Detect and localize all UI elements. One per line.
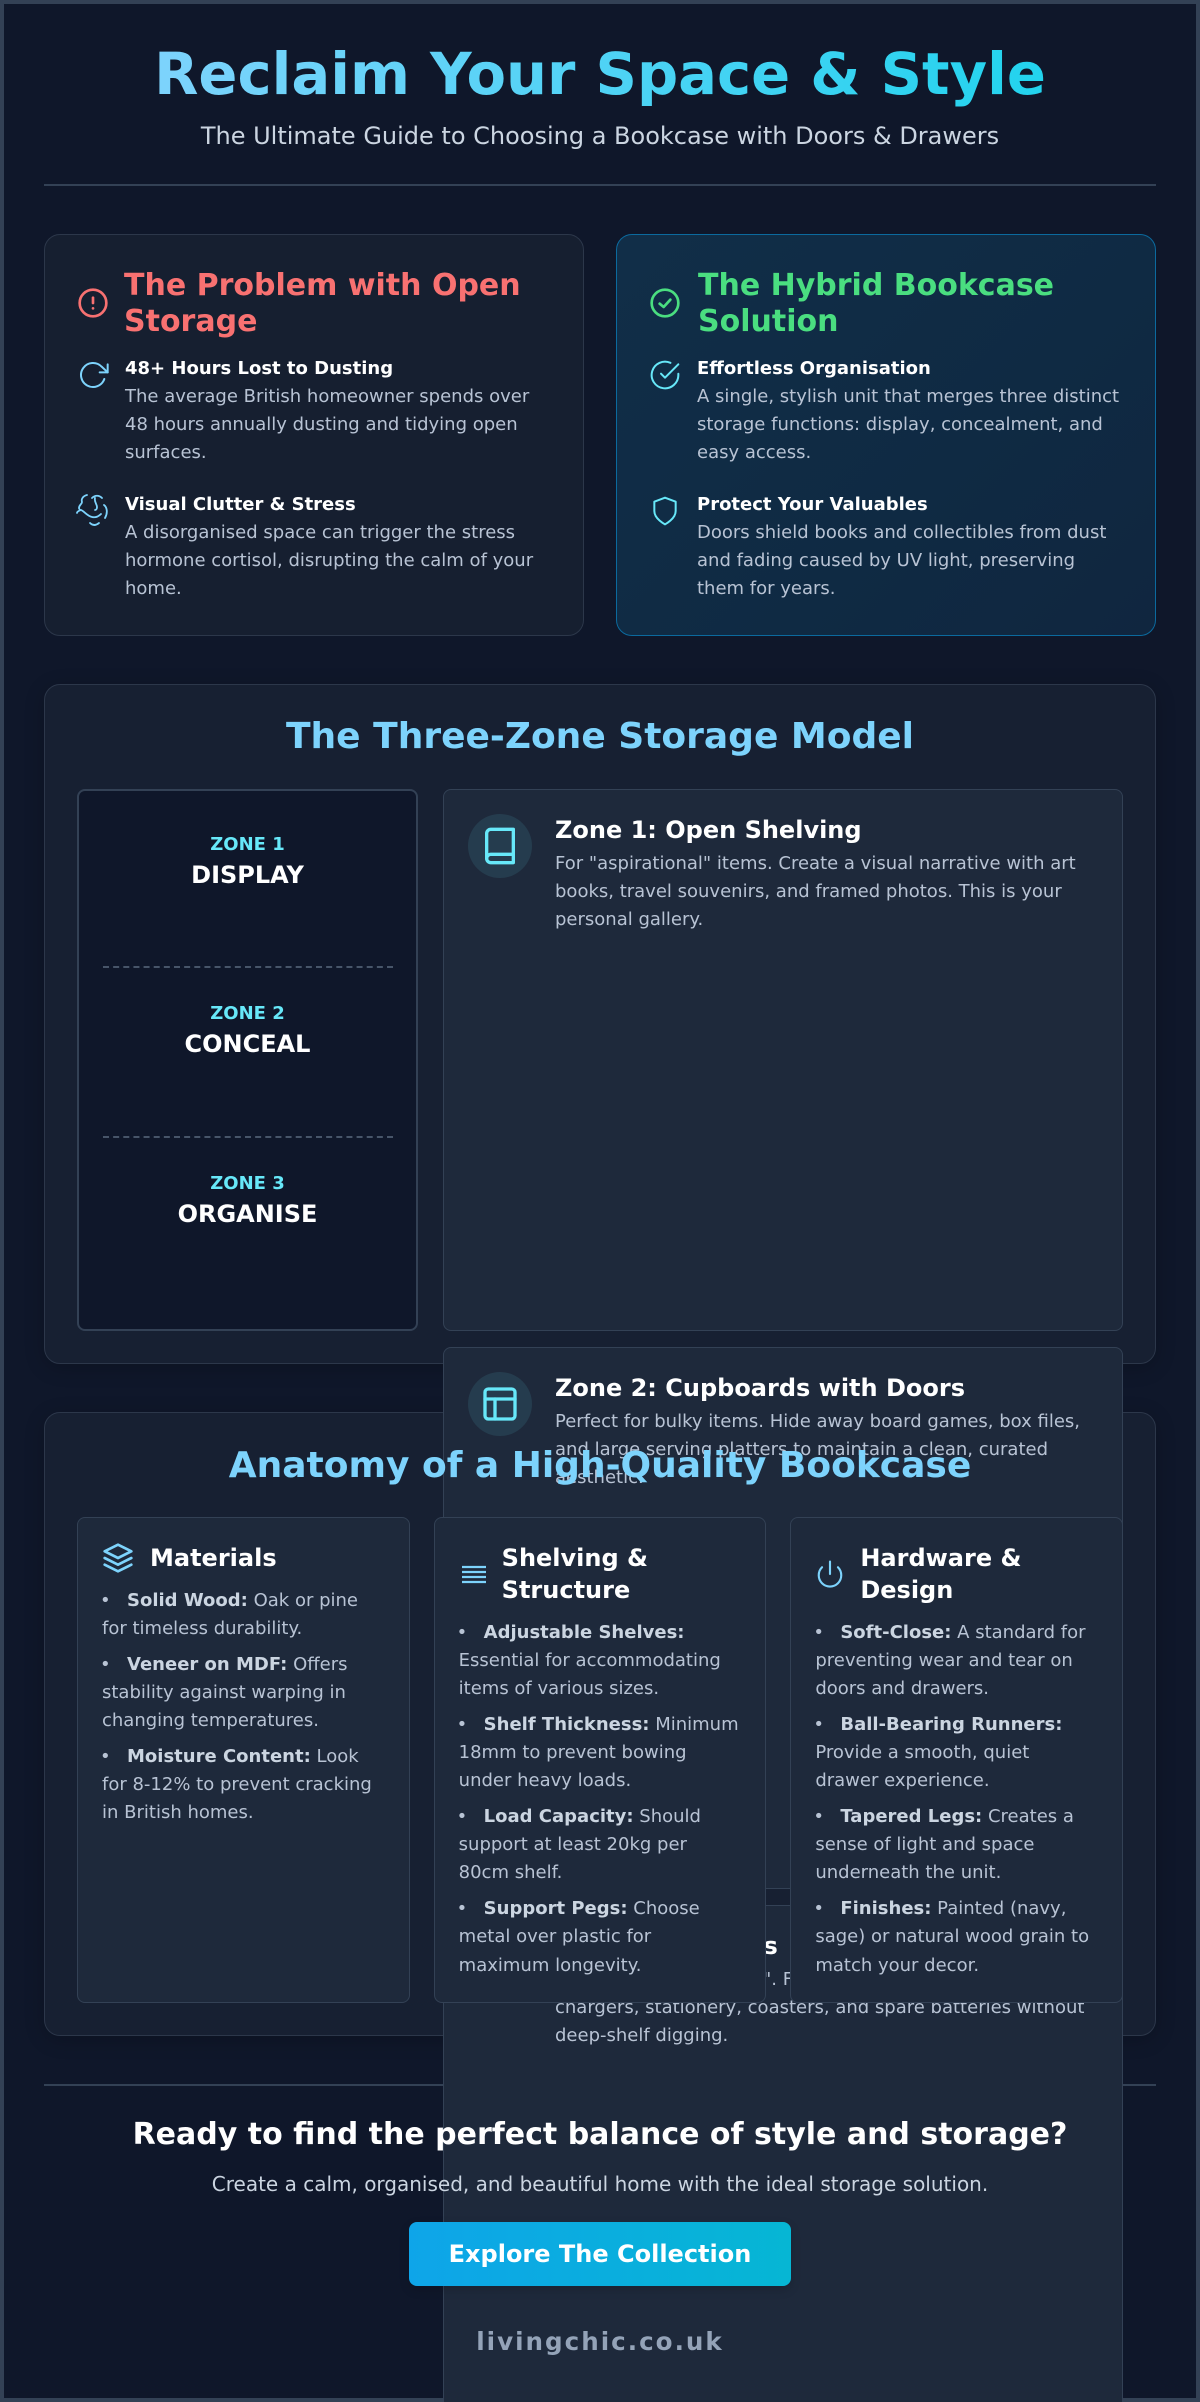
icon: shield	[653, 496, 677, 526]
spec list: Shelf Thickness: Minimum	[484, 1714, 739, 1735]
zone text: For "aspirational" items. Create a visual narrative with art	[555, 853, 1076, 874]
zone heading: Zone 1: Open Shelving	[555, 816, 862, 844]
spec list: Solid Wood: Oak or pine	[127, 1590, 358, 1611]
label: display: DISPLAY	[191, 861, 304, 889]
spec list: Support Pegs: Choose	[484, 1898, 700, 1919]
item text: dusting: The average British homeowner spends over	[125, 386, 529, 407]
spec list: items of various sizes.	[459, 1678, 659, 1699]
zone card: cupboards with doors	[443, 1347, 1123, 1889]
heading: solution	[698, 268, 1054, 339]
item text: dusting: surfaces.	[125, 442, 207, 463]
item title: organisation: Effortless Organisation	[697, 358, 931, 379]
spec list: drawer experience.	[815, 1770, 990, 1791]
zone card: open shelving	[443, 789, 1123, 1331]
icon: swirling clutter	[76, 494, 108, 526]
label: zone 3: ZONE 3	[210, 1173, 285, 1194]
zone text: books, travel souvenirs, and framed photos. This is your	[555, 881, 1062, 902]
spec list: Tapered Legs: Creates a	[840, 1806, 1074, 1827]
zone text	[555, 1969, 1084, 2046]
spec list: Finishes: Painted (navy,	[840, 1898, 1066, 1919]
zone text: For "regular essentials". Find	[555, 1969, 820, 1990]
item title: valuables: Protect Your Valuables	[697, 494, 928, 515]
zone text: aesthetic.	[555, 1467, 644, 1488]
spec list: metal over plastic for	[459, 1926, 651, 1947]
spec list: stability against warping in	[102, 1682, 346, 1703]
spec list: maximum longevity.	[459, 1954, 642, 1976]
spec list: in British homes.	[102, 1802, 254, 1823]
card heading: Materials	[150, 1544, 277, 1572]
spec list	[815, 1622, 1089, 1976]
icon: layers	[103, 1543, 133, 1573]
item title: clutter: Visual Clutter & Stress	[125, 494, 356, 515]
icon: layout panel	[468, 1372, 532, 1436]
item text: clutter: A disorganised space can trigger the stress	[125, 522, 515, 543]
item text: clutter: home.	[125, 578, 182, 599]
heading: solution: The Hybrid Bookcase	[698, 268, 1054, 303]
bookcase zone diagram	[77, 789, 418, 1331]
zone text: Perfect for bulky items. Hide away board games, box files,	[555, 1411, 1080, 1432]
item text: clutter: hormone cortisol, disrupting the calm of your	[125, 550, 533, 571]
item text: organisation	[697, 386, 1119, 463]
card heading: Shelving &	[502, 1544, 648, 1572]
item text: dusting: 48 hours annually dusting and tidying open	[125, 414, 518, 435]
icon: shelf lines	[462, 1566, 486, 1584]
zone text: and large serving platters to maintain a clean, curated	[555, 1439, 1048, 1460]
item text: valuables: Doors shield books and collectibles from dust	[697, 522, 1106, 543]
label: zone 1: ZONE 1	[210, 834, 285, 855]
spec list: 80cm shelf.	[459, 1862, 562, 1883]
spec list: 18mm to prevent bowing	[459, 1742, 687, 1763]
spec list: support at least 20kg per	[459, 1834, 687, 1855]
zone heading: Zone 3: Drawers	[555, 1932, 778, 1960]
label: zone 2: ZONE 2	[210, 1003, 285, 1024]
spec list	[459, 1622, 739, 1976]
item text: valuables: and fading caused by UV light, preserving	[697, 550, 1075, 571]
item text: valuables	[697, 522, 1106, 599]
zone text	[555, 853, 1076, 930]
zone heading: Zone 2: Cupboards with Doors	[555, 1374, 965, 1402]
card: shelving and structure	[434, 1517, 766, 2003]
icon: book	[468, 814, 532, 878]
zone card: drawers	[443, 1905, 1123, 2402]
item text: valuables: them for years.	[697, 578, 836, 599]
heading: problem	[124, 268, 521, 339]
card heading: Structure	[502, 1576, 630, 1604]
spec list: Soft-Close: A standard for	[840, 1622, 1086, 1643]
label: conceal: CONCEAL	[184, 1030, 310, 1058]
spec list: underneath the unit.	[815, 1862, 1001, 1883]
heading: problem: Storage	[124, 304, 257, 339]
spec list: Load Capacity: Should	[484, 1806, 701, 1827]
card: hardware and design	[790, 1517, 1123, 2003]
card: materials	[77, 1517, 410, 2003]
icon: open check circle	[650, 360, 680, 390]
heading: problem: The Problem with Open	[124, 268, 521, 303]
spec list: doors and drawers.	[815, 1678, 989, 1699]
card heading	[502, 1544, 648, 1604]
label: organise: ORGANISE	[178, 1200, 317, 1228]
heading: three-zone storage model: The Three-Zone Storage Model	[286, 716, 914, 757]
panel: hybrid bookcase solution	[616, 234, 1156, 636]
brand url: livingchic.co.uk	[476, 2327, 724, 2356]
panel: three-zone model background	[44, 684, 1156, 1364]
spec list: Provide a smooth, quiet	[815, 1742, 1029, 1763]
item text: clutter	[125, 522, 534, 599]
spec list: sage) or natural wood grain to	[815, 1926, 1089, 1947]
spec list: for timeless durability.	[102, 1618, 302, 1639]
button: explore the collection	[409, 2222, 791, 2286]
spec list: Ball-Bearing Runners:	[840, 1714, 1062, 1735]
zone text: personal gallery.	[555, 909, 703, 930]
call to action heading: Ready to find the perfect balance of style and storage?	[133, 2117, 1067, 2152]
icon: alert circle	[78, 288, 108, 318]
item title: dusting: 48+ Hours Lost to Dusting	[125, 358, 393, 379]
card heading	[860, 1544, 1021, 1604]
button: explore the collection: Explore The Collection	[449, 2240, 751, 2268]
spec list: Adjustable Shelves:	[484, 1622, 684, 1643]
heading: solution: Solution	[698, 304, 838, 339]
item text: organisation: A single, stylish unit that merges three distinct	[697, 386, 1119, 407]
item text: dusting	[124, 386, 530, 463]
title: Reclaim Your Space & Style	[154, 41, 1046, 108]
spec list	[102, 1590, 372, 1823]
heading: anatomy of a high-quality bookcase: Anatomy of a High-Quality Bookcase	[229, 1445, 971, 1486]
panel: problem with open storage	[44, 234, 584, 636]
spec list: sense of light and space	[815, 1834, 1034, 1855]
spec list: under heavy loads.	[459, 1770, 631, 1791]
spec list: Essential for accommodating	[459, 1650, 721, 1671]
call to action text: Create a calm, organised, and beautiful home with the ideal storage solution.	[212, 2172, 988, 2196]
panel: anatomy background	[44, 1412, 1156, 2036]
subtitle: The Ultimate Guide to Choosing a Bookcase with Doors & Drawers	[201, 122, 999, 150]
spec list: changing temperatures.	[102, 1710, 319, 1731]
spec list: match your decor.	[815, 1954, 979, 1976]
spec list: Moisture Content: Look	[127, 1746, 359, 1767]
zone text: deep-shelf digging.	[555, 2025, 728, 2046]
spec list: preventing wear and tear on	[815, 1650, 1073, 1671]
icon: rotate arrow	[80, 362, 109, 388]
spec list: for 8-12% to prevent cracking	[102, 1774, 372, 1795]
card heading: Hardware &	[860, 1544, 1021, 1572]
spec list: Veneer on MDF: Offers	[127, 1654, 348, 1675]
icon: power	[818, 1560, 842, 1588]
zone text	[555, 1411, 1080, 1488]
zone text: chargers, stationery, coasters, and spare batteries without	[555, 1997, 1084, 2018]
item text: organisation: easy access.	[697, 442, 811, 463]
item text: organisation: storage functions: display, concealment, and	[697, 414, 1103, 435]
icon: check circle	[650, 288, 680, 318]
card heading: Design	[860, 1576, 953, 1604]
